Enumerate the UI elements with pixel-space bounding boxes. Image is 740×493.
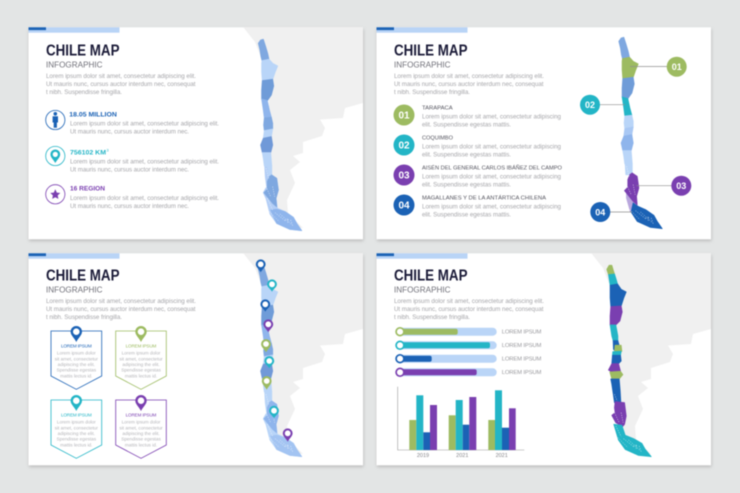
card: purple: sit amet, consectetur xyxy=(119,425,163,430)
card: teal: Spendisse egestas xyxy=(56,437,97,442)
list item 04: MAGALLANES Y DE LA ANTÁRTICA CHILENA xyxy=(422,194,546,201)
stat: area xyxy=(46,146,219,174)
intro text: Lorem ipsum dolor sit amet, consectetur adipiscing elit. xyxy=(46,298,196,305)
card: teal: adipiscing the elit. xyxy=(58,431,95,436)
intro text xyxy=(46,73,196,96)
header tab xyxy=(376,253,468,259)
intro text: Ut mauris nunc, cursus auctor interdum nec, consequat xyxy=(46,306,196,313)
list item 02 xyxy=(394,134,562,159)
stat: area: 756102 KM xyxy=(70,149,107,156)
bar chart: 2021 xyxy=(496,453,508,459)
icon: pin xyxy=(135,395,147,411)
card: purple: LOREM IPSUM xyxy=(126,412,157,417)
card: teal xyxy=(51,395,102,458)
stat: population: 18.05 MILLION xyxy=(69,112,117,119)
card: teal: mattis lectus id. xyxy=(60,442,92,447)
progress bar: purple: LOREM IPSUM xyxy=(502,370,541,376)
card: blue: sit amet, consectetur xyxy=(55,356,98,361)
card: green xyxy=(116,326,166,389)
list item 02: elit. Suspendisse egestas mattis. xyxy=(422,152,511,159)
card: purple xyxy=(116,395,166,458)
intro text xyxy=(46,298,196,321)
title: CHILE MAP xyxy=(46,268,120,285)
callout 04 xyxy=(590,202,632,222)
icon: star xyxy=(50,189,60,199)
card: blue: adipiscing the elit. xyxy=(58,362,95,367)
intro text: t nibh. Suspendisse fringilla. xyxy=(394,89,470,96)
header tab xyxy=(376,27,468,33)
progress bar: purple xyxy=(396,368,541,376)
callout 04: 04 xyxy=(595,208,605,218)
subtitle: INFOGRAPHIC xyxy=(394,285,450,295)
list item 02: Lorem ipsum dolor sit amet, consectetur adipiscing xyxy=(422,144,562,151)
callout 01 xyxy=(630,57,687,77)
title: CHILE MAP xyxy=(394,268,468,285)
title: CHILE MAP xyxy=(394,43,468,60)
intro text: Lorem ipsum dolor sit amet, consectetur adipiscing elit. xyxy=(394,73,544,80)
stat: regions: Lorem ipsum dolor sit amet, consectetur adipiscing elit. xyxy=(70,195,219,202)
grey continent xyxy=(243,253,363,454)
card: purple: Spendisse egestas xyxy=(121,437,161,442)
stat: regions xyxy=(46,185,219,210)
card: blue: Lorem ipsum dolor xyxy=(57,351,96,356)
card: teal: Lorem ipsum dolor xyxy=(57,420,96,425)
header tab xyxy=(28,253,120,259)
callout 03: 03 xyxy=(676,181,686,191)
list item 03 xyxy=(394,164,563,189)
intro text: t nibh. Suspendisse fringilla. xyxy=(394,314,470,321)
callout 03 xyxy=(637,176,691,196)
stat: regions: 16 REGION xyxy=(70,186,105,193)
icon: pin xyxy=(71,395,82,411)
progress bar: teal: LOREM IPSUM xyxy=(502,343,541,349)
card: green: LOREM IPSUM xyxy=(126,343,157,348)
map: Chile with highlighted regions xyxy=(619,37,662,229)
intro text: Lorem ipsum dolor sit amet, consectetur adipiscing elit. xyxy=(46,73,196,80)
map pins xyxy=(256,259,293,442)
list item 04: 04 xyxy=(398,201,410,212)
card: green: Spendisse egestas xyxy=(121,368,161,373)
card: purple: Lorem ipsum dolor xyxy=(122,420,161,425)
stat: population xyxy=(46,110,219,135)
panel: location cards xyxy=(28,253,364,467)
panel: top regions list xyxy=(376,27,712,241)
card: blue: Spendisse egestas xyxy=(56,368,97,373)
title: CHILE MAP xyxy=(46,43,120,60)
list item 03: elit. Suspendisse egestas mattis. xyxy=(422,182,511,189)
intro text: Lorem ipsum dolor sit amet, consectetur adipiscing elit. xyxy=(394,298,544,305)
stat: area: 3 xyxy=(106,148,109,152)
card: purple: mattis lectus id. xyxy=(125,442,157,447)
icon: pin xyxy=(71,326,82,342)
intro text: Ut mauris nunc, cursus auctor interdum nec, consequat xyxy=(46,81,196,88)
subtitle: INFOGRAPHIC xyxy=(394,60,450,70)
card: blue: mattis lectus id. xyxy=(60,373,92,378)
icon: location pin xyxy=(50,150,60,163)
bar chart xyxy=(398,387,524,459)
icon: pin xyxy=(135,326,147,342)
list item 03: 03 xyxy=(398,171,410,182)
list item 01: TARAPACA xyxy=(422,105,453,111)
map: Chile in multiple colours xyxy=(607,265,651,457)
icon: person xyxy=(53,112,58,128)
list item 04: Lorem ipsum dolor sit amet, consectetur adipiscing xyxy=(422,204,562,211)
grey continent xyxy=(591,253,711,454)
progress bar: blue xyxy=(396,355,541,363)
card: teal: sit amet, consectetur xyxy=(55,425,98,430)
list item 03: AISÉN DEL GENERAL CARLOS IBÁÑEZ DEL CAMPO xyxy=(422,164,563,171)
subtitle: INFOGRAPHIC xyxy=(46,60,102,70)
list item 04 xyxy=(394,194,562,219)
list item 04: elit. Suspendisse egestas mattis. xyxy=(422,212,511,219)
list item 01: 01 xyxy=(398,111,410,122)
list item 02: 02 xyxy=(398,141,410,152)
list item 01: elit. Suspendisse egestas mattis. xyxy=(422,122,511,129)
intro text: Ut mauris nunc, cursus auctor interdum nec, consequat xyxy=(394,81,544,88)
card: green: Lorem ipsum dolor xyxy=(122,351,161,356)
callout 02 xyxy=(580,95,625,115)
card: green: mattis lectus id. xyxy=(125,373,157,378)
card: blue: LOREM IPSUM xyxy=(61,343,92,348)
intro text: t nibh. Suspendisse fringilla. xyxy=(46,89,122,96)
list item 01 xyxy=(394,104,562,129)
panel: population, area and regions xyxy=(28,27,364,241)
callout 02: 02 xyxy=(585,100,595,110)
list item 02: COQUIMBO xyxy=(422,135,454,141)
stat: population: Lorem ipsum dolor sit amet, consectetur adipiscing elit. xyxy=(70,120,219,127)
card: blue xyxy=(51,326,102,389)
bar chart: 2021 xyxy=(456,453,468,459)
intro text: Ut mauris nunc, cursus auctor interdum nec, consequat xyxy=(394,306,544,313)
intro text: t nibh. Suspendisse fringilla. xyxy=(46,314,122,321)
stat: population: Ut mauris nunc, cursus auctor interdum nec. xyxy=(70,128,189,135)
progress bar: blue: LOREM IPSUM xyxy=(502,356,541,362)
progress bar: teal xyxy=(396,341,541,349)
card: teal: LOREM IPSUM xyxy=(61,412,92,417)
progress bar: green xyxy=(396,328,541,336)
progress bar: green: LOREM IPSUM xyxy=(502,329,541,335)
card: green: sit amet, consectetur xyxy=(119,356,163,361)
header tab xyxy=(28,27,120,33)
stat: regions: Ut mauris nunc, cursus auctor interdum nec. xyxy=(70,203,189,210)
card: purple: adipiscing the elit. xyxy=(122,431,160,436)
stat: area: Ut mauris nunc, cursus auctor interdum nec. xyxy=(70,167,189,174)
subtitle: INFOGRAPHIC xyxy=(46,285,102,295)
panel: progress bars and bar chart xyxy=(376,253,712,467)
callout 01: 01 xyxy=(672,62,682,72)
list item 03: Lorem ipsum dolor sit amet, consectetur adipiscing xyxy=(422,174,562,181)
bar chart: 2019 xyxy=(417,453,429,459)
map: Chile with pins xyxy=(258,265,302,457)
map: Chile in blue tones xyxy=(258,39,302,231)
intro text xyxy=(394,298,544,321)
intro text xyxy=(394,73,544,96)
stat: area: Lorem ipsum dolor sit amet, consectetur adipiscing elit. xyxy=(70,158,219,165)
list item 01: Lorem ipsum dolor sit amet, consectetur adipiscing xyxy=(422,114,562,121)
card: green: adipiscing the elit. xyxy=(122,362,160,367)
grey continent xyxy=(243,27,363,228)
